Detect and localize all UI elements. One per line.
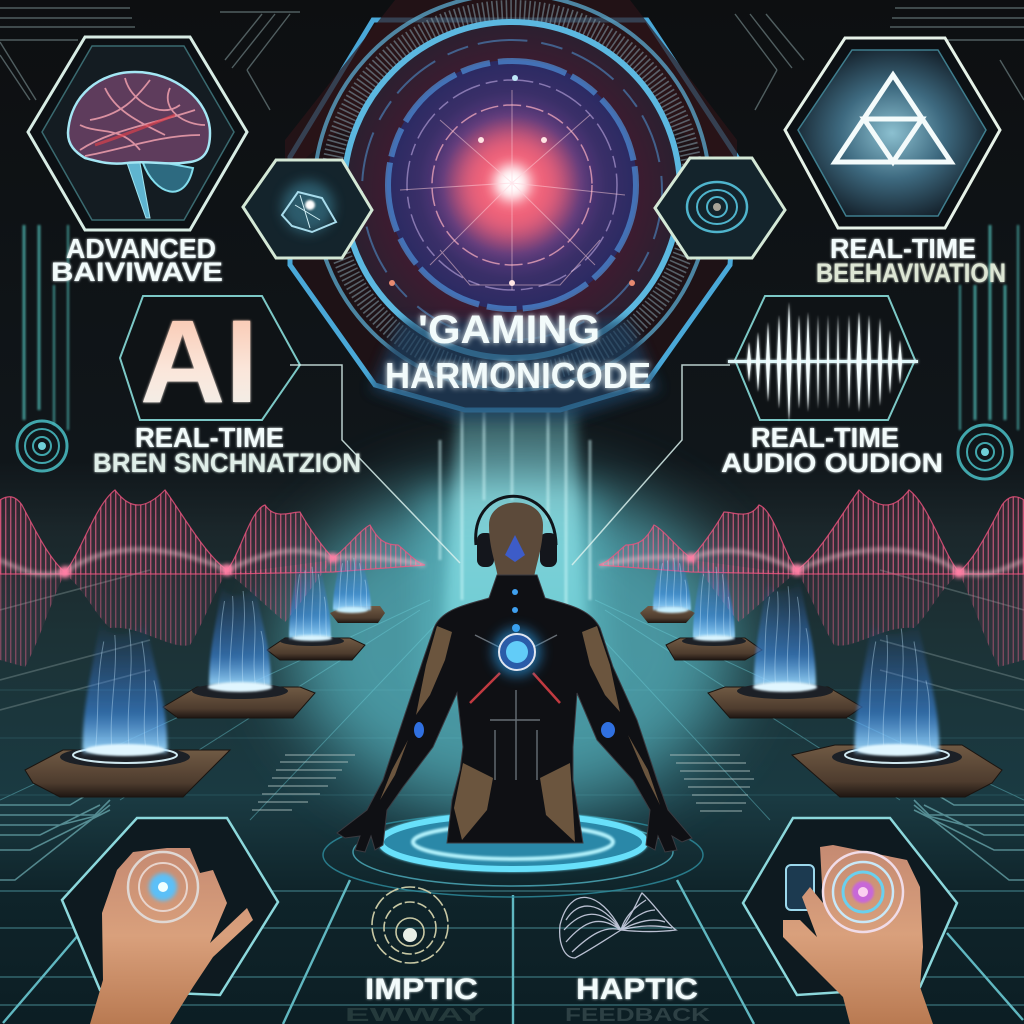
icon: haptic wave: [560, 893, 676, 958]
label: real-time brain sync: BREN SNCHNATZION: [93, 448, 361, 478]
pedestals right: [640, 555, 1002, 797]
pedestal left 2: [163, 586, 315, 718]
face circuit: [505, 535, 525, 562]
hex: triangles: [785, 38, 1000, 228]
label: advanced brainwave: BAIVIWAVE: [51, 257, 223, 287]
title: HARMONICODE: [385, 355, 651, 396]
portal lower title shade: [370, 320, 660, 420]
label: real-time activation: REAL-TIME: [830, 233, 976, 264]
hex: small right: [655, 158, 785, 258]
label: haptic: HAPTIC: [576, 973, 698, 1006]
label: real-time audio: REAL-TIME: [751, 422, 899, 453]
connector: AI to figure: [290, 365, 460, 563]
glowing ring: [128, 852, 198, 922]
arm lights: [414, 722, 615, 738]
hex: audio waveform: [728, 296, 918, 422]
AI text: AI: [140, 296, 258, 428]
figure: [337, 496, 692, 852]
device block: [786, 865, 814, 910]
floor circuit texture: [0, 570, 1024, 880]
right conduit with ring node: [958, 225, 1018, 479]
pedestal right 3: [666, 563, 762, 660]
glowing ring: [823, 852, 903, 932]
panel: bottom-left hand control: [62, 818, 278, 1024]
light beam: [420, 395, 610, 690]
head: [489, 502, 543, 585]
left pink wave: [0, 490, 425, 667]
pedestal far right 4: [640, 555, 695, 623]
label: real-time brain sync: REAL-TIME: [135, 422, 284, 453]
top circuit lines: [0, 8, 1024, 110]
pedestal right 1: [792, 622, 1002, 797]
icon: concentric rings: [687, 182, 747, 232]
icon: crystal burst: [282, 181, 336, 233]
chest core: [493, 628, 541, 676]
title: 'GAMING: [418, 308, 600, 352]
label: real-time audio: [721, 422, 943, 478]
headphones: [476, 496, 557, 567]
label: advanced brainwave: [51, 233, 223, 287]
left conduit with ring node: [17, 225, 68, 471]
icon: imptic swirl: [372, 887, 448, 963]
floor perspective grid: [0, 600, 1024, 1024]
hex: small left: [243, 160, 372, 258]
pedestal right 2: [708, 581, 862, 718]
pedestal far left 4: [330, 555, 385, 623]
pedestal left 1: [25, 622, 230, 797]
hex: brain: [28, 37, 247, 230]
icon: brain: [68, 72, 210, 218]
hex: AI: [120, 296, 300, 428]
right pink wave: [599, 490, 1024, 667]
label: real-time audio: AUDIO OUDION: [721, 448, 943, 478]
spine lights: [512, 589, 520, 632]
label: imptic: IMPTIC: [365, 973, 478, 1006]
hand left: [90, 848, 253, 1024]
central glow: [287, 480, 737, 810]
central orb portal: [285, 0, 737, 420]
label: real-time activation: [816, 233, 1006, 288]
water ring: [323, 813, 703, 897]
torso and arms: [337, 575, 692, 852]
panel: bottom-right hand control: [743, 818, 957, 1024]
connector: audio to figure: [572, 365, 730, 565]
label: advanced brainwave: ADVANCED: [66, 233, 216, 264]
hand right: [783, 845, 933, 1024]
pedestals left: [25, 555, 385, 797]
label: real-time brain sync: [93, 422, 361, 478]
icon: waveform: [728, 302, 918, 422]
title: [385, 308, 651, 396]
pedestal left 3: [267, 563, 365, 660]
armor highlights: [380, 626, 660, 842]
icon: triangle emblem: [835, 75, 951, 162]
